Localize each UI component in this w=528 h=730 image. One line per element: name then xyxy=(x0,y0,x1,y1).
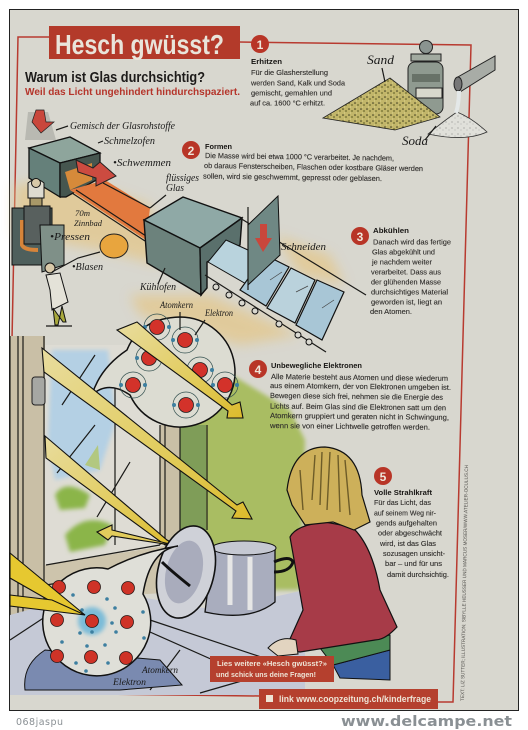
step 2: Formen xyxy=(205,142,232,151)
illustration: glass bubble xyxy=(100,234,128,258)
illustration: melting furnace xyxy=(29,137,100,197)
step 2: Die Masse wird bei etwa 1000 °C verarbeitet. Je nachdem, xyxy=(205,151,394,163)
step 3: den Atomen. xyxy=(370,307,412,316)
light arrow through atoms xyxy=(117,322,243,418)
label: Atomkern top: Atomkern xyxy=(159,300,193,310)
label: Gemisch der Glasrohstoffe: Gemisch der Glasrohstoffe xyxy=(70,121,175,132)
link banner xyxy=(259,689,438,709)
label: flüssiges Glas: flüssiges xyxy=(166,173,199,184)
label: Schmelzofen: Schmelzofen xyxy=(104,136,155,147)
illustration: washes behind glass factory xyxy=(15,178,345,345)
step 3: 3 xyxy=(357,230,364,244)
step 5: bar – und für uns xyxy=(385,559,442,568)
label: flüssiges Glas: Glas xyxy=(166,183,184,194)
step 2: 2 xyxy=(188,144,195,158)
light arrow to pot lid xyxy=(45,436,178,546)
step 2 xyxy=(182,141,423,183)
label: 70m Zinnbad: Zinnbad xyxy=(74,219,103,228)
step 1: werden Sand, Kalk und Soda xyxy=(250,78,346,88)
illustration: press with figure on top xyxy=(12,178,64,272)
step 2: sollen, wird sie geschwemmt, gepresst oder geblasen. xyxy=(203,172,382,183)
step 4: Atomkern gruppiert und geraten nicht in Schwingung, xyxy=(270,411,449,422)
step 5: 5 xyxy=(380,470,387,484)
step 1: gemischt, gemahlen und xyxy=(251,88,332,98)
step 4: wenn sie von einer Lichtwelle getroffen werden. xyxy=(269,421,430,432)
label: Elektron bottom: Elektron xyxy=(112,678,146,688)
callout: more questions: und schick uns deine Fragen! xyxy=(216,670,316,679)
step 3 xyxy=(351,226,451,316)
step 3: geworden ist, liegt an xyxy=(371,298,442,306)
step 4: aus einem Atomkern, der von Elektronen umgeben ist. xyxy=(270,381,451,392)
light arrow lower branch xyxy=(10,595,85,615)
illustration: pot xyxy=(205,541,293,615)
lower atoms zoom circle xyxy=(43,546,178,676)
step 1: auf ca. 1600 °C erhitzt. xyxy=(250,98,325,108)
step 3: verarbeitet. Dass aus xyxy=(371,268,441,276)
label: flüssiges Glas xyxy=(166,173,199,194)
step 4: Bewegen diese sich frei, nehmen sie die Energie des xyxy=(270,391,443,402)
step 4: 4 xyxy=(255,363,262,377)
label: Atomkern bottom: Atomkern xyxy=(141,666,178,676)
label: Soda: Soda xyxy=(402,133,428,148)
label: Blasen: •Blasen xyxy=(72,262,103,273)
illustration: raw material arrow xyxy=(25,110,103,143)
illustration: cutting blade xyxy=(248,196,280,290)
step 4: Alle Materie besteht aus Atomen und diese wiederum xyxy=(271,372,448,383)
illustration: kitchen counter and sink xyxy=(10,590,305,695)
step 1: Für die Glasherstellung xyxy=(251,68,328,77)
link banner: link www.coopzeitung.ch/kinderfrage xyxy=(279,694,431,704)
illustration: conveyor with glass sheets xyxy=(205,218,366,352)
illustration: cooling kiln xyxy=(144,197,242,295)
illustration: glass blower figure xyxy=(45,252,100,326)
illustration: molten glass float line xyxy=(70,160,166,241)
label: Schwemmen: •Schwemmen xyxy=(113,158,171,169)
step 1 xyxy=(250,35,346,108)
answer subtitle: Weil das Licht ungehindert hindurchspaziert. xyxy=(25,87,240,98)
step 5: Für das Licht, das xyxy=(374,498,431,507)
label: 70m Zinnbad xyxy=(74,209,103,228)
step 5: damit durchsichtig. xyxy=(387,570,449,579)
light arrow into lower circle xyxy=(10,553,85,615)
step 3: durchsichtiges Material xyxy=(371,288,448,296)
atoms zoom circle xyxy=(92,312,239,427)
label: Pressen: •Pressen xyxy=(50,232,90,243)
step 5: gends aufgehalten xyxy=(376,518,437,528)
step 3: je nachdem weiter xyxy=(371,258,433,266)
credit line: TEXT: LIZ SUTTER; ILLUSTRATION: SIBYLLE HEUSSER UND MARCUS MOSER/WWW.ATELIER-OCULUS.CH xyxy=(460,465,470,701)
label: 70m Zinnbad: 70m xyxy=(75,209,90,218)
illustration: girl from behind xyxy=(268,447,397,680)
label: Schneiden: Schneiden xyxy=(281,242,326,253)
label: Sand: Sand xyxy=(367,52,395,67)
question title: Warum ist Glas durchsichtig? xyxy=(25,70,205,86)
step 3: Glas abgekühlt und xyxy=(372,248,435,256)
red frame line xyxy=(10,37,471,702)
label: Kühlofen: Kühlofen xyxy=(139,282,176,293)
step 5 xyxy=(374,467,449,579)
step 3: der glühenden Masse xyxy=(371,278,441,286)
illustration: window scene background xyxy=(10,336,305,616)
illustration: sand, kalk jar and soda xyxy=(323,40,495,140)
step 3: Danach wird das fertige xyxy=(373,238,451,246)
callout: more questions: Lies weitere «Hesch gwüsst?» xyxy=(217,659,327,668)
step 2: ob daraus Fensterscheiben, Flaschen oder kostbare Gläser werden xyxy=(204,161,423,173)
step 4 xyxy=(249,360,451,432)
watermark: seller id: 068jaspu xyxy=(16,717,63,728)
illustration: pot lid xyxy=(147,520,225,624)
step 3: Abkühlen xyxy=(373,226,409,235)
step 4: Unbewegliche Elektronen xyxy=(271,361,362,370)
step 5: oder abgeschwächt xyxy=(378,528,442,538)
light arrow through window xyxy=(42,348,252,519)
step 5: Volle Strahlkraft xyxy=(374,488,432,497)
step 4: Lichts auf. Beim Glas sind die Elektronen satt um den xyxy=(270,402,446,412)
step 5: auf seinem Weg nir- xyxy=(374,508,437,518)
reflected light arrow xyxy=(97,525,178,546)
label: Elektron top: Elektron xyxy=(204,308,233,318)
step 1: Erhitzen xyxy=(251,57,282,66)
step 5: wird, ist das Glas xyxy=(379,539,436,548)
step 1: 1 xyxy=(257,38,264,52)
step 5: sozusagen unsicht- xyxy=(383,549,446,558)
watermark: delcampe: www.delcampe.net xyxy=(341,714,512,730)
heading banner: Hesch gwüsst? xyxy=(55,29,224,60)
callout: more questions xyxy=(210,656,334,682)
